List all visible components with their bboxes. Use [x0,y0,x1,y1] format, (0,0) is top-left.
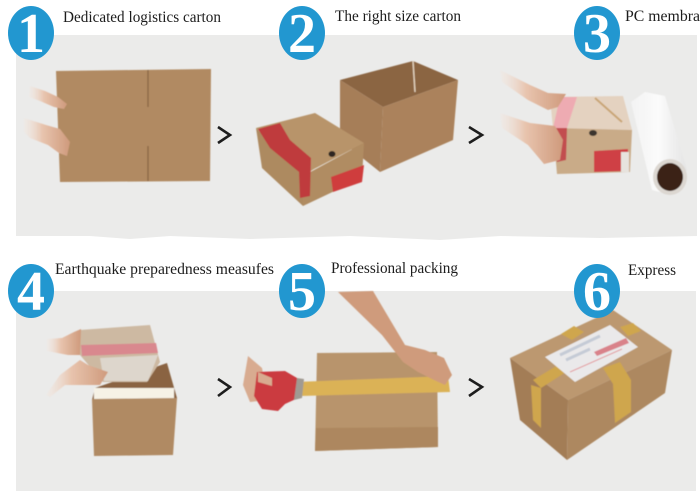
badge 3 [574,3,620,65]
step 2: closed and open cartons [256,61,458,206]
heading 2: The right size carton [335,8,461,25]
arrow 3 [218,379,230,396]
icon: tape strip [296,376,450,396]
icon: parcel [510,310,672,460]
arrow 2 [469,127,482,143]
badge 2: 2 [288,3,316,65]
icon: arm and hand [338,291,452,385]
step 4: placing package in cushioned box [46,325,177,456]
badge 4 [8,261,54,323]
icon: flat cardboard [56,69,211,182]
badge 2 [279,3,325,65]
icon: open box with filler [92,363,177,456]
badge 6 [574,261,620,323]
icon: wrapped box [550,96,632,174]
heading 3: PC membra [625,8,700,25]
icon: hands holding carton [24,86,70,156]
badge 4: 4 [17,261,45,323]
icon: wrapped package [80,325,160,382]
badge 1: 1 [17,3,45,65]
icon: carton [315,352,438,451]
step 5: sealing with tape [243,291,452,451]
badge 5 [279,261,325,323]
arrow 4 [469,379,482,396]
panel: top background [16,35,697,240]
icon: open carton [340,61,458,172]
icon: hands on box [500,70,566,164]
badge 6: 6 [583,261,611,323]
heading 6: Express [628,262,676,279]
panel: bottom background [16,291,696,491]
icon: tape dispenser [243,356,304,411]
badge 5: 5 [288,261,316,323]
icon: tape bands [531,323,641,428]
badge 3: 3 [583,3,611,65]
arrow 1 [218,127,230,143]
heading 5: Professional packing [331,260,458,277]
step 6: sealed parcel [510,310,672,460]
badge 1 [8,3,54,65]
icon: film roll [631,92,687,195]
heading 1: Dedicated logistics carton [63,9,221,26]
heading 4: Earthquake preparedness measufes [55,261,274,278]
step 3: wrapping box in film [500,70,687,195]
icon: shipping label [545,325,638,382]
icon: hands holding package [46,329,108,397]
step 1: flat carton with hands [24,69,211,182]
icon: closed carton with red band [256,113,364,206]
